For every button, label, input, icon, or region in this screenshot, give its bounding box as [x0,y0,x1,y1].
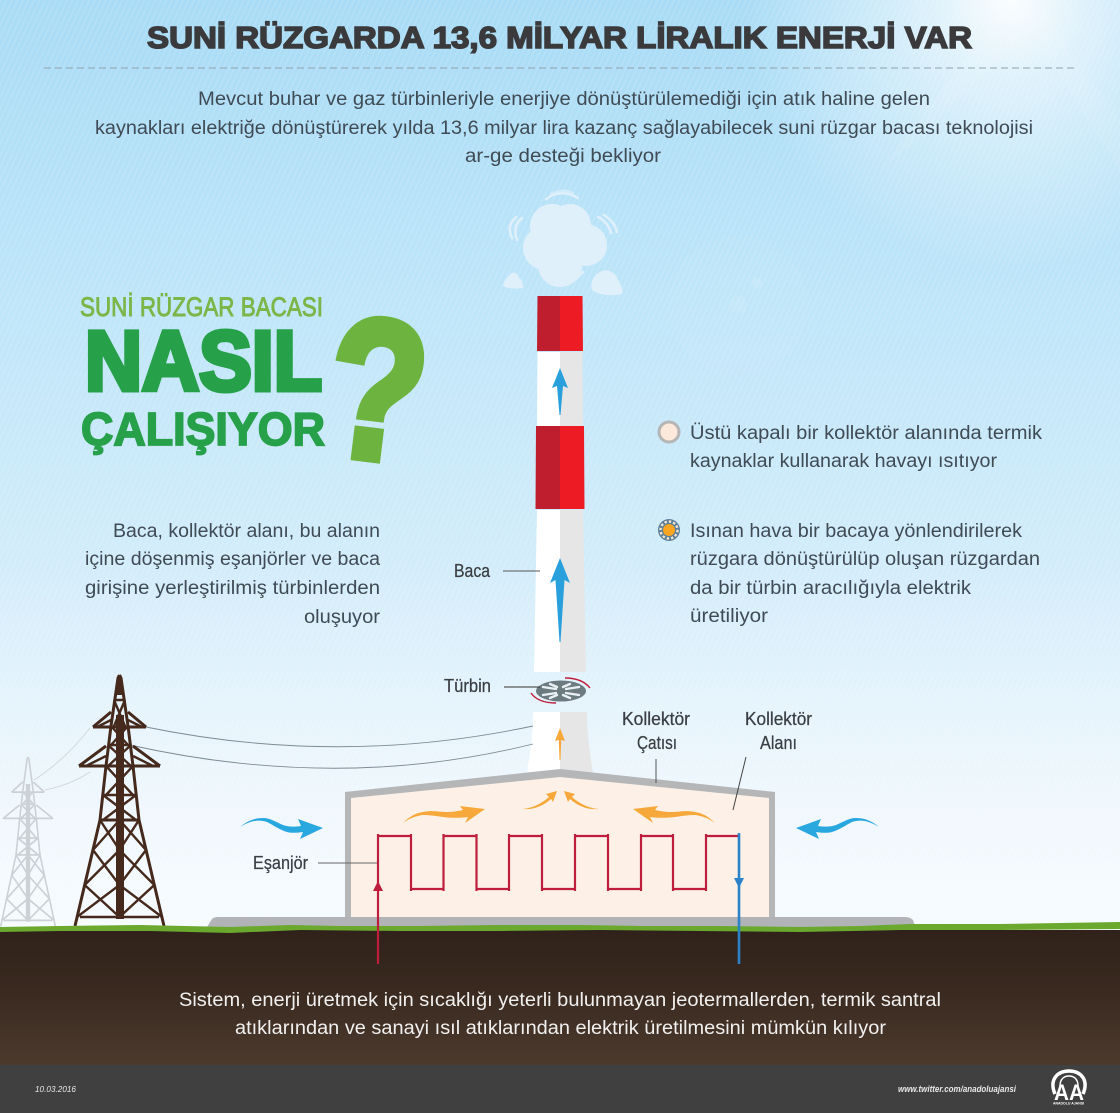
bottom text [179,990,941,1039]
bullet: wind generation [658,519,1040,627]
arrow: warm air centre left [522,791,557,809]
intro text [95,89,1033,167]
label: Baca [454,561,540,581]
bullet: heated collector: Üstü kapalı bir kollektör alanında termik [690,423,1043,444]
bullet: wind generation: Isınan hava bir bacaya yönlendirilerek [690,521,1023,542]
left description text: girişine yerleştirilmiş türbinlerden [85,578,380,599]
bullet: wind generation: üretiliyor [690,606,769,627]
bullet: wind generation: rüzgara dönüştürülüp oluşan rüzgardan [690,549,1040,570]
arrow: wind from left [240,818,323,839]
logo: Anadolu Ajansı [1053,1071,1085,1106]
title: SUNİ RÜZGARDA 13,6 MİLYAR LİRALIK ENERJİ VAR [147,20,972,55]
label: Kollektör Çatısı: Kollektör [622,709,690,729]
left description text [85,521,381,628]
icon: sun circle [658,519,680,541]
arrow: lower chimney [550,558,570,642]
turbine [531,678,590,703]
arrow: warm air right [633,806,715,823]
smoke cloud [503,191,622,295]
logo: Anadolu Ajansı: AA [1054,1080,1084,1105]
label: Kollektör Çatısı: Çatısı [637,733,677,753]
collector roof and walls [345,769,775,917]
pale distant pylon [1,757,55,926]
cold water out [738,833,740,964]
heading: suni rüzgar bacası nasıl çalışıyor: NASIL [85,314,322,408]
airflow arrows [240,791,879,839]
twitter address: www.twitter.com/anadoluajansi [898,1084,1016,1094]
ground: soil and grass [0,922,1120,1066]
intro text: ar-ge desteği bekliyor [465,146,662,167]
arrow: cold water out [734,878,744,888]
bottom text: Sistem, enerji üretmek için sıcaklığı yeterli bulunmayan jeotermallerden, termik santral [179,990,941,1011]
bullet: wind generation: da bir türbin aracılığıyla elektrik [690,578,972,599]
arrow: warm air left [403,806,485,823]
label: Kollektör Alanı [733,709,812,810]
label: Eşanjör [253,853,377,873]
left description text: Baca, kollektör alanı, bu alanın [113,521,380,542]
bullet: heated collector: kaynaklar kullanarak havayı ısıtıyor [690,451,998,472]
power lines [34,726,533,790]
arrow: wind from right [796,818,879,839]
label: Eşanjör: Eşanjör [253,853,308,873]
footer bar [0,1065,1120,1113]
main pylon [75,675,164,926]
heading: suni rüzgar bacası nasıl çalışıyor: ÇALIŞIYOR [81,403,325,455]
collector building [204,769,917,932]
bullet: heated collector [659,422,1043,472]
label: Kollektör Çatısı [622,709,690,783]
logo: Anadolu Ajansı: ANADOLU AJANSI [1053,1102,1084,1106]
question mark: ? [316,274,439,505]
intro text: kaynakları elektriğe dönüştürerek yılda 13,6 milyar lira kazanç sağlayabilecek suni rüzgar bacası teknolojisi [95,118,1033,139]
chimney [527,296,593,772]
left description text: içine döşenmiş eşanjörler ve baca [85,549,380,570]
date: 10.03.2016 [35,1085,77,1094]
left description text: oluşuyor [304,607,381,628]
heading: suni rüzgar bacası nasıl çalışıyor: SUNİ RÜZGAR BACASI [80,291,323,322]
arrow: hot water in [373,881,383,891]
arrow: upper chimney [552,368,568,415]
label: Baca: Baca [454,561,491,581]
arrow: chimney base [555,728,565,760]
label: Türbin [444,676,540,696]
icon: collector circle [659,422,679,442]
bottom text: atıklarından ve sanayi ısıl atıklarından elektrik üretilmesini mümkün kılıyor [235,1018,887,1039]
intro text: Mevcut buhar ve gaz türbinleriyle enerjiye dönüştürülemediği için atık haline gelen [198,89,930,110]
label: Türbin: Türbin [444,676,491,696]
foundation [204,917,917,932]
heading: suni rüzgar bacası nasıl çalışıyor [80,274,439,505]
arrow: warm air centre right [564,791,599,809]
label: Kollektör Alanı: Alanı [760,733,797,753]
collector interior [351,777,769,917]
label: Kollektör Alanı: Kollektör [745,709,812,729]
heat exchanger [373,833,744,964]
